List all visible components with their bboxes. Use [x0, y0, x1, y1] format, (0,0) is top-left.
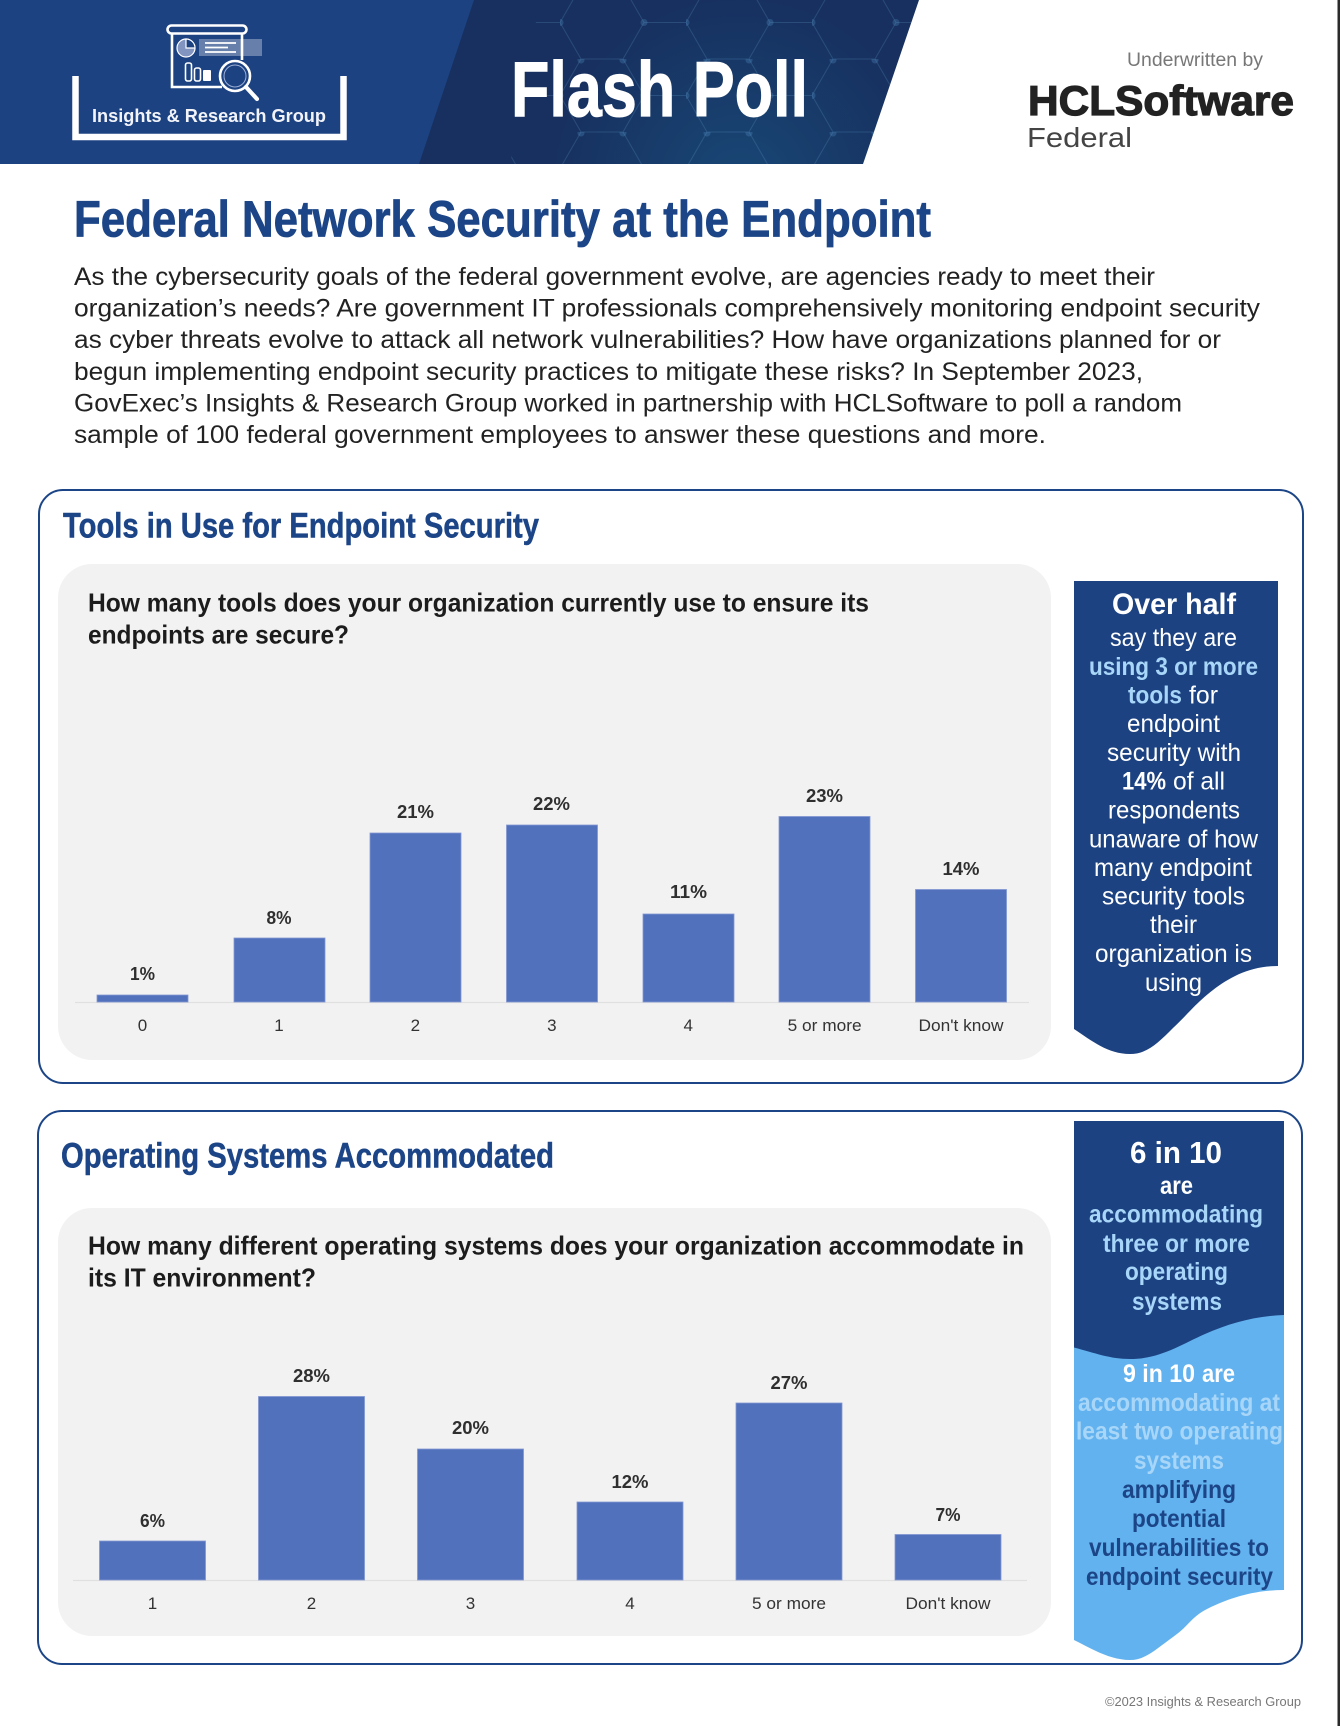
main title: Federal Network Security at the Endpoint — [74, 190, 931, 248]
callout: 9 in 10: endpoint security — [1086, 1563, 1273, 1591]
sponsor block — [1027, 49, 1294, 153]
question: operating systems: How many different operating systems does your organization accommodate in — [88, 1230, 1024, 1260]
callout: over half: security tools — [1102, 882, 1245, 910]
panel: tools in use — [39, 490, 1303, 1083]
bar don't know — [895, 1504, 1001, 1613]
callout: over half: tools — [1128, 682, 1182, 710]
bar don't know: Don't know — [906, 1594, 991, 1613]
callout: over half: endpoint — [1127, 710, 1220, 738]
callout: over half: for — [1189, 682, 1218, 710]
callout: over half: say they are — [1110, 624, 1237, 652]
callout: over half: organization is — [1095, 940, 1252, 968]
sponsor logo: Federal: Federal — [1027, 122, 1132, 153]
bar 5 or more: 5 or more — [788, 1016, 862, 1035]
bar 5 or more: 23% — [806, 785, 843, 806]
section heading: operating systems: Operating Systems Accommodated — [61, 1136, 554, 1176]
logo wordmark: Insights & Research Group — [92, 106, 326, 126]
bar 3: 3 — [547, 1016, 557, 1035]
callout: over half: many endpoint — [1094, 854, 1252, 882]
chart panel: tools — [58, 564, 1051, 1060]
copyright footer: ©2023 Insights & Research Group — [1105, 1694, 1301, 1709]
intro paragraph: As the cybersecurity goals of the federal government evolve, are agencies ready to meet their — [74, 263, 1155, 291]
bar 0: 0 — [138, 1016, 147, 1035]
callout: 9 in 10: least two operating — [1076, 1418, 1283, 1446]
bar don't know: 7% — [936, 1504, 960, 1525]
callout: 9 in 10: amplifying — [1122, 1476, 1236, 1504]
bar 4: 12% — [612, 1471, 648, 1492]
callout: 6 in 10: three or more — [1103, 1230, 1250, 1258]
question: tools: endpoints are secure? — [88, 620, 349, 650]
callout: over half: their — [1150, 911, 1197, 939]
callout: 9 in 10: are — [1202, 1360, 1235, 1388]
bar 2: 28% — [293, 1365, 330, 1386]
bar 3: 20% — [452, 1417, 489, 1438]
logo: Insights & Research Group — [76, 26, 344, 137]
icon: presentation board with magnifier — [168, 26, 262, 99]
callout: over half: 14% — [1122, 768, 1166, 796]
callout: 9 in 10: systems — [1134, 1447, 1224, 1475]
intro paragraph: organization’s needs? Are government IT professionals comprehensively monitoring endpoint security — [74, 295, 1261, 323]
bar 0 — [97, 963, 188, 1035]
intro paragraph: GovExec’s Insights & Research Group worked in partnership with HCLSoftware to poll a random — [74, 390, 1182, 418]
callout: over half: of all — [1173, 768, 1225, 796]
bar 5 or more — [736, 1372, 842, 1613]
bar chart: operating systems — [100, 1365, 1001, 1613]
callout: 6 in 10: accommodating — [1089, 1200, 1263, 1228]
callout: 6 in 10: systems — [1132, 1288, 1222, 1316]
bar don't know: 14% — [942, 858, 980, 879]
bar 5 or more: 27% — [770, 1372, 808, 1393]
bar 3: 3 — [466, 1594, 475, 1613]
section heading: tools: Tools in Use for Endpoint Security — [63, 506, 539, 546]
bar 2: 2 — [411, 1016, 420, 1035]
chart panel: operating systems — [58, 1208, 1051, 1636]
intro paragraph: sample of 100 federal government employees to answer these questions and more. — [74, 421, 1046, 449]
bar 1 — [234, 907, 325, 1035]
banner title: Flash Poll — [511, 45, 808, 133]
intro paragraph: as cyber threats evolve to attack all network vulnerabilities? How have organizations planned for or — [74, 326, 1221, 354]
bar 2: 21% — [397, 801, 434, 822]
callout: over half — [1074, 581, 1278, 1054]
question: operating systems — [88, 1230, 1024, 1292]
bar 1: 6% — [140, 1510, 165, 1531]
callout: 6 in 10 — [1074, 1121, 1284, 1359]
callout: over half: unaware of how — [1089, 826, 1259, 854]
bar don't know: Don't know — [918, 1016, 1004, 1035]
question: tools — [88, 588, 869, 650]
dark slanted banner with hexagon network — [419, 0, 919, 164]
bar 2 — [370, 801, 461, 1035]
underwritten by: Underwritten by — [1127, 49, 1263, 71]
bar 2 — [258, 1365, 364, 1613]
bar 4: 11% — [670, 881, 707, 902]
panel: operating systems — [38, 1111, 1302, 1664]
bar 1: 8% — [266, 907, 292, 928]
logo bracket — [76, 76, 344, 137]
bar chart: tools — [97, 785, 1006, 1035]
intro paragraph: begun implementing endpoint security practices to mitigate these risks? In September 2023, — [74, 358, 1143, 386]
intro paragraph — [74, 263, 1261, 449]
callout: over half: using — [1145, 969, 1202, 997]
bar 3 — [418, 1417, 524, 1613]
question: operating systems: its IT environment? — [88, 1262, 316, 1292]
callout: 9 in 10: potential — [1132, 1505, 1226, 1533]
callout: 9 in 10: accommodating at — [1078, 1389, 1281, 1417]
callout: over half: using 3 or more — [1089, 653, 1258, 681]
callout: 6 in 10: are — [1160, 1172, 1193, 1200]
question: tools: How many tools does your organization currently use to ensure its — [88, 588, 869, 618]
callout: 9 in 10 — [1074, 1300, 1284, 1660]
bar 1: 1 — [148, 1594, 157, 1613]
callout: over half: respondents — [1108, 796, 1240, 824]
bar 0: 1% — [130, 963, 155, 984]
callout: 6 in 10: 6 in 10 — [1130, 1135, 1222, 1170]
callout: over half: security with — [1107, 739, 1241, 767]
callout: 9 in 10: 9 in 10 — [1123, 1360, 1195, 1388]
bar 5 or more: 5 or more — [752, 1594, 826, 1613]
callout: 6 in 10: operating — [1125, 1258, 1228, 1286]
callout: over half: Over half — [1112, 588, 1237, 621]
bar 3 — [506, 793, 598, 1035]
bar 4 — [643, 881, 734, 1035]
bar 3: 22% — [533, 793, 570, 814]
bar 4 — [577, 1471, 683, 1613]
bar 1: 1 — [274, 1016, 284, 1035]
sponsor logo: HCLSoftware: HCLSoftware — [1028, 77, 1294, 124]
header banner — [0, 0, 919, 164]
bar 4: 4 — [625, 1594, 635, 1613]
bar 5 or more — [779, 785, 870, 1035]
bar 2: 2 — [307, 1594, 316, 1613]
bar 1 — [100, 1510, 206, 1613]
callout: 9 in 10: vulnerabilities to — [1089, 1534, 1269, 1562]
bar 4: 4 — [683, 1016, 693, 1035]
bar don't know — [916, 858, 1006, 1035]
